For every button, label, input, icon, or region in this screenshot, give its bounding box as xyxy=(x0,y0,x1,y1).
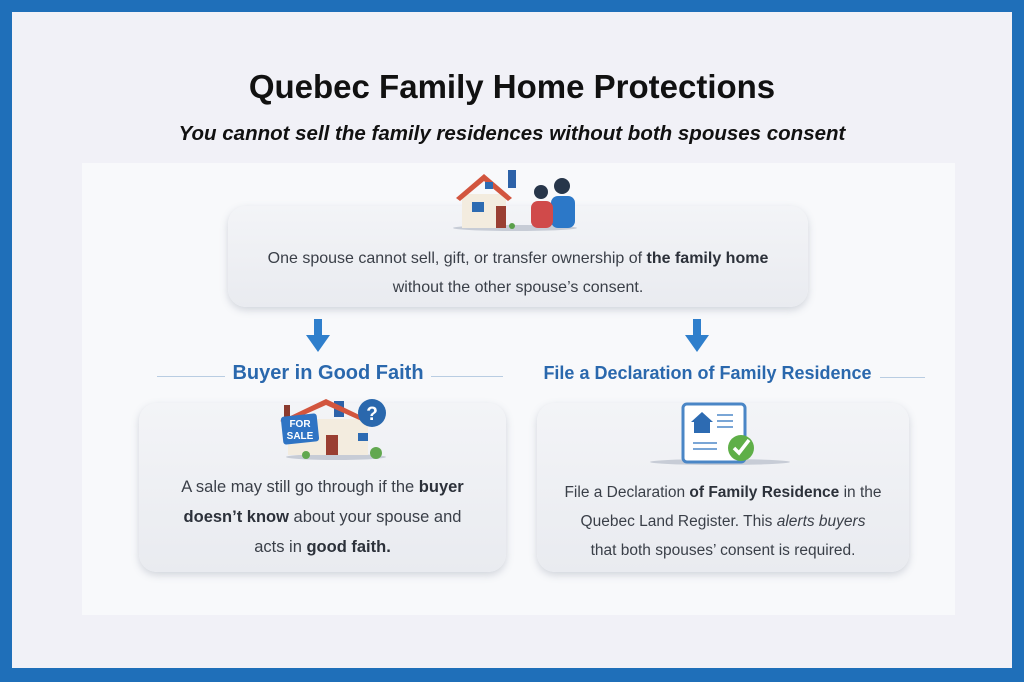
subtitle: You cannot sell the family residences without both spouses consent xyxy=(179,122,845,145)
heading: buyer in good faith: Buyer in Good Faith xyxy=(232,362,424,384)
arrow: left xyxy=(306,319,330,352)
text: buyer in good faith: acts in good faith. xyxy=(254,538,391,556)
text: buyer in good faith xyxy=(181,478,464,556)
panel: top card xyxy=(228,206,808,307)
text: declaration xyxy=(564,484,882,559)
text: declaration: that both spouses’ consent is required. xyxy=(591,542,855,559)
text: top card: without the other spouse’s consent. xyxy=(393,279,643,296)
icon: for sale house: ? xyxy=(366,404,378,425)
text: top card: One spouse cannot sell, gift, or transfer ownership of the family home xyxy=(268,250,768,267)
icon: house and couple xyxy=(453,170,577,231)
icon: for sale house: SALE xyxy=(287,431,314,442)
icon: document with check xyxy=(650,402,790,465)
panel: buyer in good faith xyxy=(139,403,506,572)
arrow: right xyxy=(685,319,709,352)
icon: for sale house: FOR xyxy=(289,419,311,430)
text: declaration: File a Declaration of Family Residence in the xyxy=(564,484,882,501)
text: declaration: Quebec Land Register. This alerts buyers xyxy=(581,513,865,530)
text: buyer in good faith: doesn’t know about your spouse and xyxy=(184,508,461,526)
icon: for sale house xyxy=(280,399,386,460)
text: top card xyxy=(268,250,768,296)
title: Quebec Family Home Protections xyxy=(249,68,775,105)
text: buyer in good faith: A sale may still go through if the buyer xyxy=(181,478,464,496)
panel: declaration xyxy=(537,403,909,572)
heading: declaration: File a Declaration of Family Residence xyxy=(543,363,872,383)
